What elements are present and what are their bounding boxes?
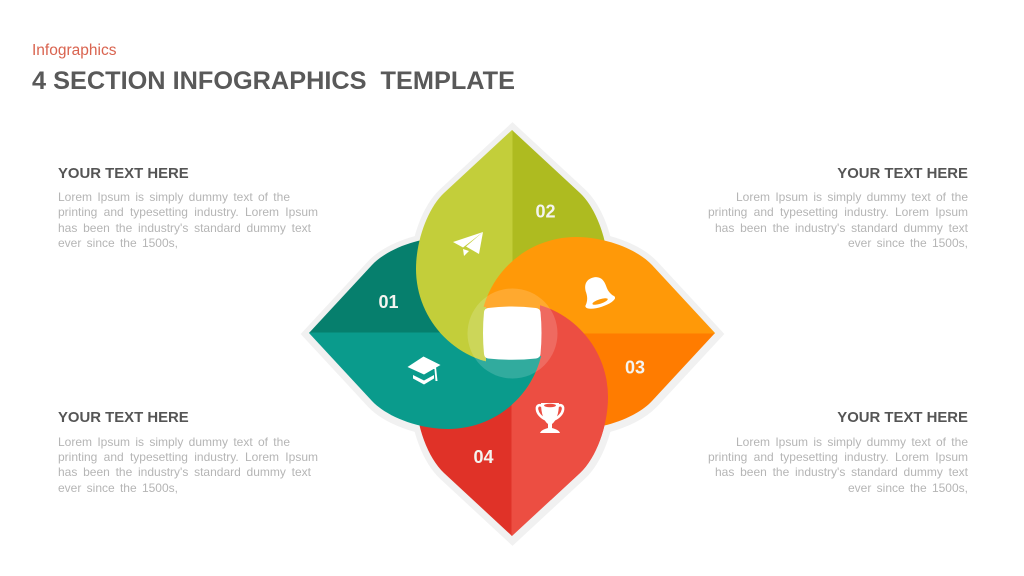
text block: bottom left: has been the industry's standard dummy text [58,465,311,479]
green blade left of centre [440,307,486,362]
number 03: 03 [625,358,645,378]
heading: top right: YOUR TEXT HERE [837,166,968,182]
teal blade below centre [484,356,542,416]
number 01: 01 [378,292,399,312]
text block: bottom right: ever since the 1500s, [848,480,968,494]
text block: top left: printing and typesetting industry. Lorem Ipsum [58,205,318,219]
outer halo [310,131,716,537]
petal 04: red [416,301,608,536]
icon: bell [578,273,617,312]
petal 03: orange [480,237,715,429]
petal 02: green [416,130,608,365]
title: 4 SECTION INFOGRAPHICS TEMPLATE [32,67,515,95]
petal 01: teal [309,237,544,429]
text block: top left: ever since the 1500s, [58,236,178,250]
icon: trophy [537,403,563,433]
number 02: 02 [535,202,556,222]
text block: bottom left: ever since the 1500s, [58,480,178,494]
text block: top right [708,190,968,250]
text block: bottom left [58,434,318,494]
white centre [483,306,542,360]
text block: top right: printing and typesetting industry. Lorem Ipsum [708,205,968,219]
icon: paper plane [453,232,483,256]
text block: top left [58,190,318,250]
icon: graduation cap [408,356,440,384]
red overlap over orange [512,305,608,500]
text block: bottom right [708,434,968,494]
text block: bottom left: Lorem Ipsum is simply dummy text of the [58,434,290,448]
text block: top left: has been the industry's standard dummy text [58,220,311,234]
heading: bottom right: YOUR TEXT HERE [837,410,968,426]
text block: bottom right: has been the industry's standard dummy text [715,465,968,479]
heading: top left: YOUR TEXT HERE [58,166,189,182]
text block: top right: ever since the 1500s, [848,236,968,250]
text block: top right: has been the industry's standard dummy text [715,220,968,234]
text block: top right: Lorem Ipsum is simply dummy text of the [736,190,968,204]
number 04: 04 [473,447,494,467]
translucent centre ring [468,288,558,378]
text block: bottom left: printing and typesetting industry. Lorem Ipsum [58,450,318,464]
label: Infographics: Infographics [32,42,116,58]
text block: top left: Lorem Ipsum is simply dummy text of the [58,190,290,204]
text block: bottom right: printing and typesetting industry. Lorem Ipsum [708,450,968,464]
heading: bottom left: YOUR TEXT HERE [58,410,189,426]
text block: bottom right: Lorem Ipsum is simply dummy text of the [736,434,968,448]
pinwheel diagram [301,122,724,546]
